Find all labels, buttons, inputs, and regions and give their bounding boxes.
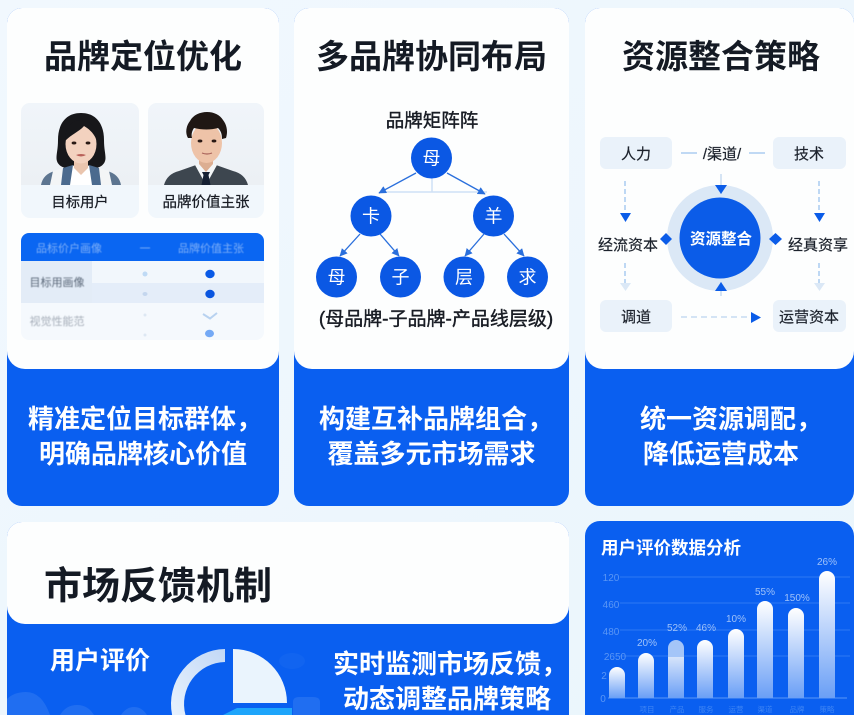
message: market feedback (333, 649, 567, 714)
x axis labels (640, 704, 835, 714)
message: brand positioning: 明确品牌核心价值 (39, 439, 247, 469)
bar value labels: 10% (726, 614, 746, 625)
table header (36, 241, 244, 255)
resource labels: /渠道/ (703, 146, 742, 163)
resource labels: 人力 (621, 146, 651, 163)
portrait: man (164, 112, 248, 185)
caption: hierarchy: (母品牌-子品牌-产品线层级) (319, 308, 553, 330)
white card: resource integration (585, 8, 854, 369)
node labels: 母 (422, 148, 440, 168)
faded arrowheads (620, 283, 825, 291)
bar value labels (637, 557, 837, 649)
y axis labels: 0 (600, 694, 606, 705)
bar value labels: 46% (696, 623, 716, 634)
heading: multi-brand layout: 多品牌协同布局 (316, 38, 547, 75)
panel: brand positioning (7, 8, 279, 506)
table header: 品牌价值主张 (178, 241, 244, 255)
x axis labels: 运营 (728, 704, 744, 714)
decorative hills (7, 653, 320, 715)
grid lines (608, 577, 850, 698)
node labels: 层 (455, 268, 473, 288)
heading: resource integration: 资源整合策略 (622, 38, 820, 75)
message: multi-brand layout: 覆盖多元市场需求 (327, 439, 536, 469)
bar chart (600, 538, 850, 714)
portrait: woman (41, 113, 121, 185)
table markers (142, 270, 217, 337)
y axis labels: 460 (603, 600, 620, 611)
white card: market feedback (7, 522, 569, 624)
message: multi-brand layout (319, 404, 553, 469)
heading: brand positioning: 品牌定位优化 (44, 38, 242, 75)
node labels: 求 (518, 268, 536, 288)
panel: user review data chart (585, 521, 854, 715)
resource labels: 技术 (794, 146, 824, 163)
node labels: 卡 (362, 206, 380, 226)
table header: 一 (140, 243, 150, 255)
bars (609, 571, 835, 698)
panel: resource integration (585, 8, 854, 506)
card: target user (21, 103, 139, 218)
message: resource integration (640, 404, 822, 469)
tree nodes (316, 138, 548, 298)
y axis labels: 480 (603, 627, 620, 638)
resource flow diagram (598, 137, 848, 332)
node labels: 子 (392, 268, 410, 288)
white card: multi-brand layout (294, 8, 569, 369)
x axis labels: 产品 (670, 704, 684, 714)
bar value labels: 20% (637, 638, 657, 649)
x axis labels: 项目 (640, 705, 654, 714)
node labels: 羊 (484, 206, 502, 226)
x axis labels: 渠道 (758, 704, 773, 714)
x axis labels: 服务 (698, 704, 714, 714)
resource labels: 经真资享 (788, 236, 848, 254)
message: resource integration: 统一资源调配， (640, 404, 822, 434)
resource boxes (600, 137, 846, 332)
message: multi-brand layout: 构建互补品牌组合， (319, 404, 553, 434)
white card: brand positioning (7, 8, 279, 369)
persona illustrations and table (21, 103, 264, 338)
resource labels: 调道 (621, 309, 651, 326)
resource labels: 经流资本 (598, 237, 658, 254)
card: brand value proposition (148, 103, 264, 218)
pie chart (171, 649, 292, 715)
flow arrowheads (620, 185, 825, 323)
message: market feedback: 实时监测市场反馈， (333, 649, 567, 679)
brand tree diagram (316, 110, 553, 330)
central hub: 资源整合 (690, 229, 752, 248)
x axis labels: 策略 (820, 704, 835, 714)
x axis labels: 品牌 (790, 704, 805, 714)
y axis labels: 2 (601, 671, 607, 682)
node labels (328, 148, 536, 288)
row labels: 视觉性能范 (30, 314, 84, 328)
y axis labels: 120 (603, 573, 620, 584)
background hills and user review pie (7, 649, 320, 715)
node labels: 母 (328, 268, 346, 288)
message: brand positioning: 精准定位目标群体， (28, 404, 262, 434)
chart title: 用户评价数据分析 (601, 538, 741, 558)
tree connectors (340, 173, 524, 256)
row labels: 目标用画像 (30, 275, 84, 289)
bar value labels: 26% (817, 557, 837, 568)
message: brand positioning (28, 404, 262, 469)
label: brand value proposition: 品牌价值主张 (162, 194, 250, 211)
table header: 品标价户画像 (36, 241, 102, 255)
panel: multi-brand layout (294, 8, 569, 506)
panel: market feedback (7, 522, 569, 715)
message: resource integration: 降低运营成本 (643, 439, 799, 469)
label: user reviews: 用户评价 (50, 647, 150, 675)
comparison table (21, 233, 264, 340)
row labels (30, 275, 84, 328)
bar value labels: 150% (784, 593, 810, 604)
bar value labels: 52% (667, 623, 687, 634)
bar value labels: 55% (755, 587, 775, 598)
heading: market feedback: 市场反馈机制 (44, 566, 272, 608)
label: brand matrix: 品牌矩阵阵 (386, 110, 478, 131)
y axis labels: 2650 (604, 652, 627, 663)
y axis labels (600, 573, 627, 705)
label: target user: 目标用户 (51, 194, 109, 211)
flow lines (625, 153, 819, 317)
central hub (667, 185, 773, 291)
resource labels: 运营资本 (779, 309, 839, 326)
resource labels (598, 146, 848, 326)
message: market feedback: 动态调整品牌策略 (343, 684, 551, 714)
